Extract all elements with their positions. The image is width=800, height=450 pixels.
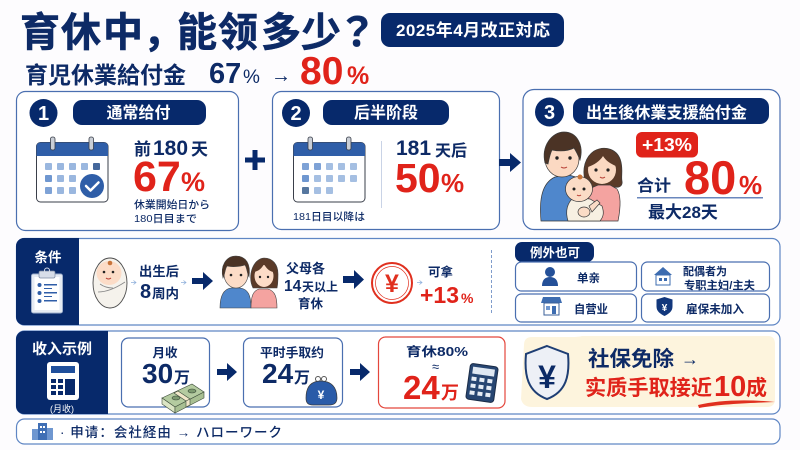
card: usual take-home: 平时手取约 — [260, 345, 324, 360]
card: monthly income: 月收 — [152, 345, 178, 360]
period label: 天 — [191, 140, 208, 159]
title — [20, 0, 377, 58]
badge: revision date: 2025年4月改正対応 — [396, 20, 550, 40]
tag: exceptions: 例外也可 — [530, 245, 580, 260]
text: +13%: +13 — [420, 282, 459, 308]
arrow — [192, 272, 213, 290]
icon: shield — [526, 346, 568, 399]
arrow — [343, 270, 364, 289]
card: leave benefit: ≈ — [432, 359, 439, 374]
icon: calendar with check — [36, 137, 108, 202]
panel header: 收入示例 — [32, 341, 92, 358]
subtitle: rate change: → — [271, 65, 291, 87]
badge: +13%: +13% — [642, 135, 692, 155]
rate 67%: % — [181, 167, 205, 197]
period label — [396, 137, 467, 160]
callout: social insurance exemption: 10 — [714, 371, 746, 403]
rate 80%: 80 — [684, 151, 736, 204]
panel header: (月收) — [50, 403, 74, 414]
tag: exceptions — [515, 242, 594, 262]
icon: swaddled baby — [93, 258, 127, 308]
step heading: 出生後休業支援給付金 — [586, 103, 747, 122]
card: monthly income — [122, 338, 210, 413]
step heading: 后半阶段 — [354, 103, 418, 122]
subtitle: rate change: % — [347, 62, 369, 90]
illustration: family — [540, 132, 622, 221]
panel: second half — [272, 92, 500, 230]
rate 67%: 67 — [133, 153, 181, 201]
period label: 天后 — [435, 142, 467, 160]
text: +13%: 可拿 — [428, 264, 453, 279]
card: dependent spouse: 专职主妇/主夫 — [684, 278, 755, 292]
step heading — [73, 100, 206, 125]
callout: social insurance exemption: 实质手取接近 — [585, 376, 712, 400]
text: 14 days: 父母各 — [286, 261, 325, 276]
panel header: 条件 — [34, 249, 62, 265]
period label: 180 — [153, 137, 188, 160]
note: 休業開始日から — [134, 198, 210, 211]
text: within 8 weeks: 8 — [140, 281, 151, 303]
note — [134, 198, 210, 225]
rate 80%: % — [739, 170, 762, 200]
text: +13%: % — [461, 290, 474, 306]
text: 14 days: 14 — [284, 278, 302, 295]
card: usual take-home: 万 — [294, 370, 310, 387]
card: self-employed — [516, 294, 636, 322]
card: no employment insurance: ¥ — [662, 303, 668, 314]
arrow — [499, 153, 521, 172]
card: dependent spouse: 配偶者为 — [683, 264, 727, 278]
card: no employment insurance: 雇保未加入 — [686, 302, 745, 316]
arrow — [217, 363, 237, 381]
rate 80% — [684, 151, 762, 204]
icon: shield: ¥ — [538, 359, 556, 395]
duration: 最大28天 — [648, 203, 718, 222]
card: single parent — [516, 262, 636, 291]
step heading — [573, 98, 769, 124]
card: monthly income: 万 — [174, 370, 190, 387]
total label: 合计 — [637, 176, 671, 195]
icon: yen coin: ¥ — [385, 270, 399, 298]
step heading — [323, 100, 449, 125]
panel: income example — [16, 331, 780, 414]
arrow — [350, 363, 370, 381]
badge: +13% — [636, 132, 698, 158]
callout: social insurance exemption: → — [681, 349, 699, 369]
badge: revision date — [381, 13, 564, 47]
step number 3 — [535, 98, 564, 126]
card: single parent: 单亲 — [577, 271, 600, 285]
text: +13% — [417, 264, 474, 308]
subtitle: rate change: 育児休業給付金 — [25, 62, 186, 88]
title: 育休中，能领多少 — [20, 11, 341, 55]
subtitle: rate change — [25, 50, 369, 93]
step heading: 通常给付 — [106, 103, 171, 122]
text: 14 days: 育休 — [298, 296, 324, 311]
panel: postnatal support — [523, 90, 780, 230]
icon: plus — [245, 150, 265, 170]
text: application: · 申请：会社経由 → ハローワーク — [60, 425, 282, 440]
rate 67% — [133, 153, 205, 201]
card: leave benefit: 24 — [403, 369, 440, 406]
icon: clipboard — [32, 268, 62, 313]
card: usual take-home: 24 — [262, 358, 294, 389]
text: within 8 weeks: 出生后 — [139, 264, 179, 279]
subtitle: rate change: % — [243, 67, 260, 88]
panel: application route — [16, 419, 780, 444]
icon: purse: ¥ — [318, 388, 325, 402]
icon: banknotes — [162, 384, 204, 413]
rate 50%: 50 — [395, 155, 441, 201]
callout: social insurance exemption: 社保免除 — [588, 347, 674, 371]
panel header — [16, 331, 108, 414]
note: 181日目以降は — [293, 210, 366, 223]
card: leave benefit: 育休80% — [406, 344, 468, 359]
card: no employment insurance — [642, 294, 770, 322]
icon: yen coin — [372, 263, 412, 303]
icon: calculator — [47, 362, 79, 400]
icon: calendar — [294, 137, 365, 202]
card: monthly income: 30 — [142, 358, 173, 389]
icon: calculator — [466, 363, 498, 403]
rate 50% — [395, 155, 464, 201]
callout: social insurance exemption — [521, 336, 775, 408]
card: leave benefit — [378, 337, 505, 408]
step number 2: 2 — [290, 103, 302, 125]
period label: 前 — [134, 140, 151, 159]
icon: parents — [220, 256, 278, 308]
text: 14 days — [284, 261, 338, 311]
panel header — [16, 238, 79, 325]
title: ？ — [337, 0, 377, 58]
subtitle: rate change: 67 — [209, 58, 241, 90]
card: self-employed: 自营业 — [574, 302, 608, 316]
callout: social insurance exemption: 成 — [746, 376, 767, 400]
text: within 8 weeks: 周内 — [152, 286, 179, 301]
step number 1: 1 — [38, 103, 49, 125]
card: usual take-home — [244, 338, 342, 407]
step number 2 — [282, 99, 310, 127]
card: leave benefit: 万 — [441, 383, 459, 403]
step number 3: 3 — [544, 102, 555, 124]
note: 180日目まで — [134, 213, 197, 225]
panel: normal benefit — [16, 92, 238, 230]
text: 14 days: 天以上 — [302, 280, 338, 294]
period label: 181 — [396, 137, 431, 160]
card: dependent spouse — [642, 262, 770, 292]
panel: conditions — [16, 238, 780, 325]
icon: office building — [32, 423, 53, 440]
subtitle: rate change: 80 — [300, 50, 343, 93]
rate 50%: % — [441, 168, 464, 198]
text: within 8 weeks — [131, 264, 186, 303]
step number 1 — [30, 99, 58, 127]
period label — [134, 137, 208, 160]
